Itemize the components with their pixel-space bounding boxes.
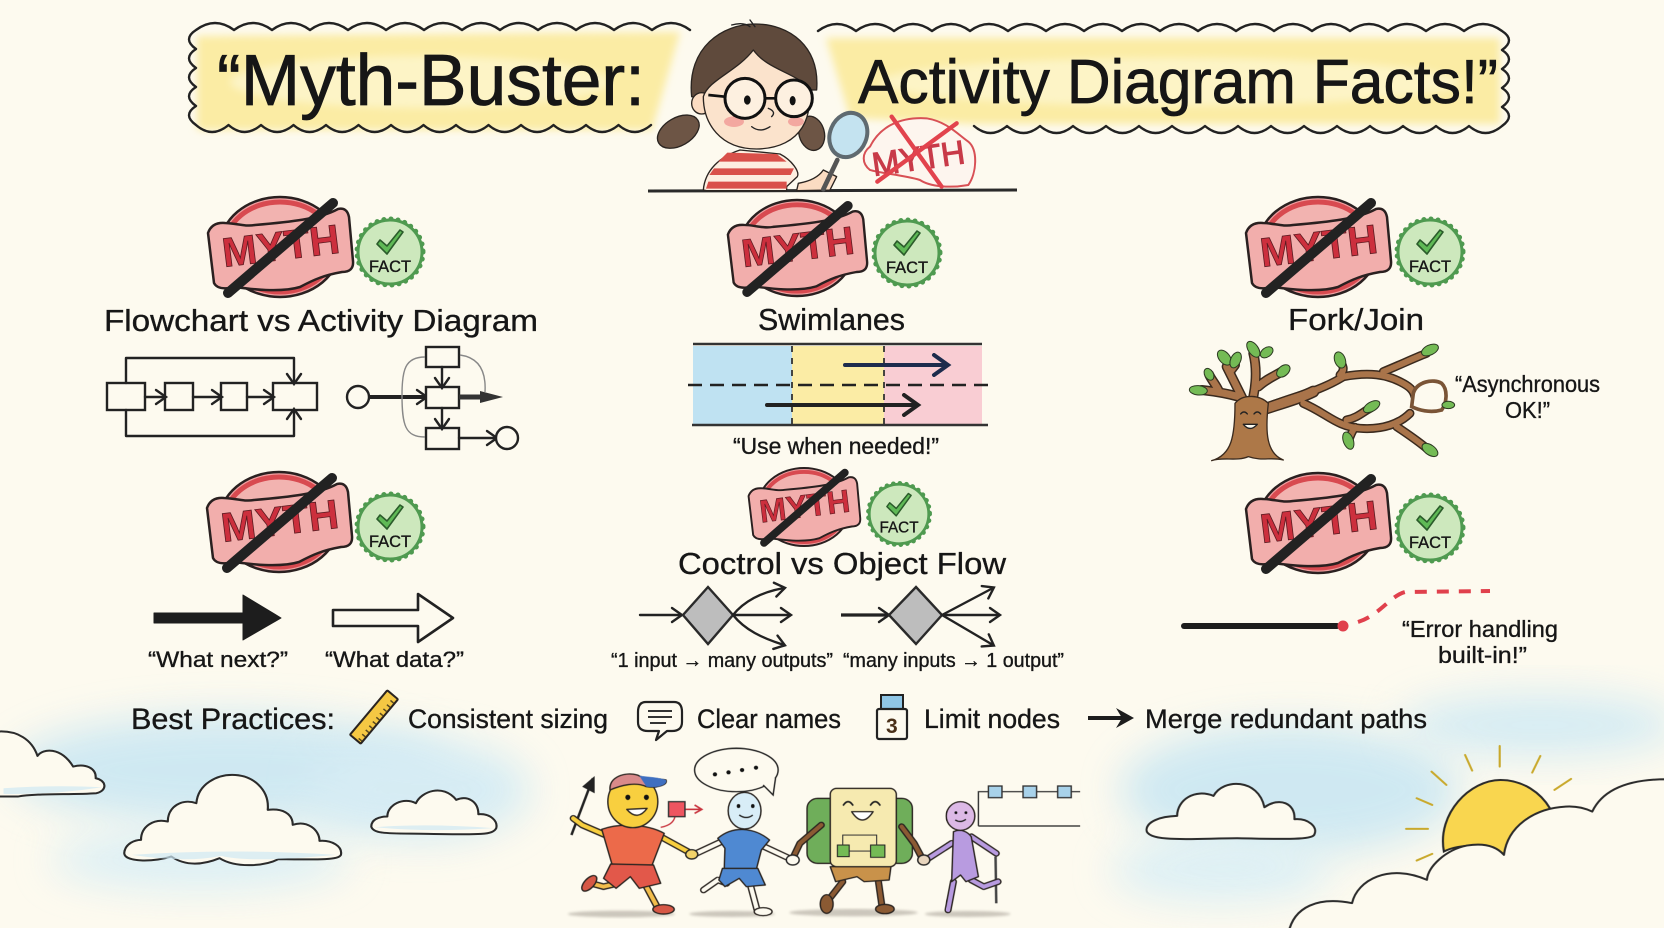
callout: OK!” bbox=[1505, 397, 1550, 423]
right clouds and sun bbox=[1146, 746, 1664, 928]
panel: error handling bbox=[1184, 473, 1558, 668]
myth stamp bbox=[1246, 197, 1391, 297]
title text right: Activity Diagram Facts!” bbox=[858, 48, 1498, 117]
myth stamp: MYTH bbox=[1258, 492, 1380, 552]
sky watercolor wash bbox=[10, 695, 1664, 902]
myth stamp: MYTH bbox=[757, 482, 852, 530]
caption: “What next?” bbox=[148, 647, 288, 672]
label: Consistent sizing bbox=[408, 704, 608, 734]
fact seal: FACT bbox=[886, 258, 928, 277]
fact seal bbox=[1397, 495, 1463, 561]
heading: Swimlanes bbox=[758, 302, 905, 337]
caption: “Use when needed!” bbox=[733, 433, 939, 459]
caption: “1 input → many outputs” bbox=[611, 650, 833, 672]
small crossed-out myth stamp: MYTH bbox=[870, 134, 967, 184]
label: Clear names bbox=[697, 704, 841, 734]
heading: Flowchart vs Activity Diagram bbox=[104, 303, 538, 338]
illustration: four hiking characters holding hands bbox=[568, 748, 1080, 917]
callout bbox=[1402, 616, 1558, 668]
icon: numbered jar bbox=[877, 695, 907, 739]
myth stamp: MYTH bbox=[739, 219, 857, 276]
fact seal bbox=[357, 219, 423, 285]
callout: “Asynchronous bbox=[1455, 371, 1600, 397]
diagram: decision many inputs one output bbox=[841, 587, 999, 645]
title banner right bbox=[818, 24, 1509, 133]
myth stamp bbox=[728, 200, 867, 296]
character: small purple hiker bbox=[928, 802, 998, 910]
myth stamp bbox=[1246, 473, 1391, 573]
panel: flowchart vs activity diagram bbox=[104, 197, 538, 449]
heading: Coctrol vs Object Flow bbox=[678, 546, 1007, 581]
fact seal: FACT bbox=[1409, 533, 1451, 552]
icon: fork-join tree bbox=[1189, 339, 1455, 461]
myth stamp bbox=[749, 468, 860, 546]
myth stamp: MYTH bbox=[220, 216, 342, 276]
myth stamp bbox=[207, 472, 352, 572]
activity diagram bbox=[347, 347, 518, 449]
illustration: girl with magnifying glass bbox=[652, 20, 975, 191]
fact seal: FACT bbox=[369, 532, 411, 551]
swimlane diagram bbox=[688, 344, 988, 425]
character: named speaker bbox=[695, 748, 793, 916]
fact seal bbox=[1397, 219, 1463, 285]
label: Merge redundant paths bbox=[1145, 704, 1427, 734]
arrow bbox=[1088, 708, 1134, 728]
myth stamp: MYTH bbox=[219, 491, 341, 551]
panel: fork/join bbox=[1189, 197, 1600, 461]
icon: sun bbox=[1406, 746, 1571, 860]
fact seal bbox=[868, 483, 930, 545]
diagram: decision one input many outputs bbox=[640, 587, 790, 645]
myth stamp bbox=[208, 197, 353, 297]
callout: “Error handling bbox=[1402, 616, 1558, 642]
icon: numbered jar: 3 bbox=[886, 715, 898, 738]
heading: Best Practices: bbox=[131, 703, 335, 736]
ground line under girl bbox=[648, 190, 1017, 191]
panel: control vs object flow bbox=[611, 468, 1064, 672]
fact seal: FACT bbox=[1409, 257, 1451, 276]
left clouds bbox=[0, 731, 497, 865]
fact seal: FACT bbox=[369, 257, 411, 276]
label: Limit nodes bbox=[924, 704, 1060, 734]
icon: ruler bbox=[350, 690, 398, 744]
callout: built-in!” bbox=[1438, 642, 1527, 668]
fact seal: FACT bbox=[879, 520, 919, 537]
panel: swimlanes bbox=[688, 200, 988, 459]
clasped hands bbox=[686, 850, 930, 865]
caption: “many inputs → 1 output” bbox=[843, 650, 1064, 672]
error path line bbox=[1184, 591, 1490, 632]
mini node diagram bbox=[978, 786, 1080, 826]
flowchart diagram bbox=[107, 358, 317, 436]
callout bbox=[1455, 371, 1600, 423]
heading: Fork/Join bbox=[1288, 302, 1424, 337]
fact seal bbox=[874, 220, 940, 286]
arrow: solid control flow bbox=[154, 595, 281, 640]
panel: control next vs data arrows bbox=[148, 472, 464, 672]
small crossed-out myth stamp bbox=[864, 117, 975, 187]
character: backpack activity node bbox=[793, 788, 923, 914]
character: control flow explorer bbox=[571, 774, 702, 914]
title banner left bbox=[189, 23, 690, 132]
fact seal bbox=[357, 494, 423, 560]
caption: “What data?” bbox=[325, 647, 464, 672]
ground shadows bbox=[568, 909, 1011, 917]
myth stamp: MYTH bbox=[1258, 216, 1380, 276]
icon: speech bubble bbox=[638, 702, 682, 740]
arrow: hollow object flow bbox=[333, 594, 453, 642]
title text left: “Myth-Buster: bbox=[217, 41, 645, 121]
best practices row bbox=[131, 690, 1427, 744]
